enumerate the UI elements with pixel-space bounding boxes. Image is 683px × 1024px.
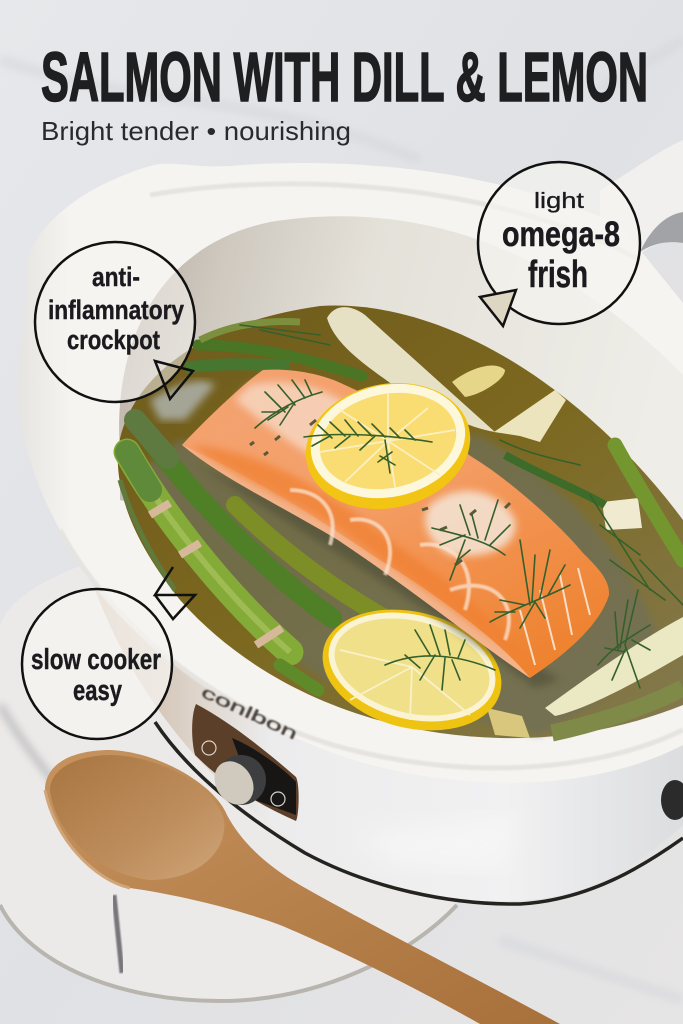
rim grooves: [60, 184, 683, 768]
salmon fillet: [182, 370, 609, 678]
marble coaster: [0, 566, 457, 1001]
lower lemon slice: [310, 592, 514, 748]
subtitle: Bright tender • nourishing: [41, 116, 351, 146]
cooker body: [95, 560, 683, 901]
back vegetables: [185, 307, 683, 560]
broth: [118, 306, 683, 738]
callout: anti-inflamnatory crockpot: anti-: [92, 262, 140, 292]
orange band: [190, 445, 530, 665]
callout: slow cooker easy: slow cooker: [31, 644, 161, 676]
main lemon slice: [294, 368, 482, 524]
brand label: conlbon: [198, 682, 301, 744]
wooden spoon: [45, 750, 560, 1024]
side button: [661, 780, 683, 820]
dill sprigs: [240, 325, 683, 690]
front asparagus: [120, 420, 683, 733]
callout: light omega-8 frish: [478, 162, 640, 326]
interior wall: [119, 216, 683, 640]
callout: light omega-8 frish: frish: [528, 254, 588, 296]
back asparagus: [198, 345, 362, 376]
outer rim: [18, 163, 683, 783]
right handle: [600, 140, 683, 256]
flake lines: [290, 490, 509, 640]
right asparagus: [615, 445, 683, 560]
parsnip pieces: [327, 307, 495, 432]
grey broth patches: [140, 435, 660, 735]
callout: slow cooker easy: easy: [73, 675, 122, 707]
slow cooker: [18, 140, 683, 904]
callout: anti-inflamnatory crockpot: crockpot: [67, 325, 160, 355]
control panel with knob: [192, 704, 299, 821]
pale top: [235, 382, 370, 460]
callout: anti-inflamnatory crockpot: [35, 242, 195, 402]
callout: light omega-8 frish: light: [534, 188, 584, 213]
callout: anti-inflamnatory crockpot: inflamnatory: [48, 295, 184, 325]
salmon shadow: [200, 465, 560, 688]
base line: [155, 722, 683, 904]
lower front edge: [182, 445, 530, 678]
seasoning: [250, 420, 510, 565]
lower right parsnip: [487, 617, 683, 738]
callout: slow cooker easy: [22, 567, 195, 739]
callout: light omega-8 frish: omega-8: [502, 215, 620, 254]
